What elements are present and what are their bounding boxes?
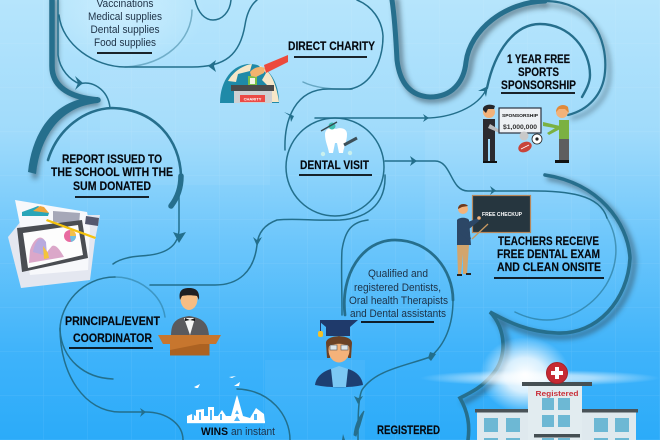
heading: teachers receive: TEACHERS RECEIVE xyxy=(498,234,599,248)
central block xyxy=(522,382,592,440)
text block: qualified staff: and Dental assistants xyxy=(350,308,446,320)
heading: sports sponsorship: SPORTS xyxy=(518,65,559,79)
text block: qualified staff: registered Dentists, xyxy=(354,282,441,294)
text: wins an instant: WINS xyxy=(201,426,228,438)
sports balls xyxy=(517,132,542,154)
cheque xyxy=(499,108,541,133)
icon: tooth with brush xyxy=(321,122,357,156)
central block: Registered xyxy=(536,391,578,398)
flow: principal circle and lower branches xyxy=(60,277,290,440)
text: wins an instant: an instant xyxy=(231,426,275,438)
heading: dental visit: DENTAL VISIT xyxy=(300,158,370,172)
flow: top circle and report circle xyxy=(48,0,257,264)
flow: dental visit circle and branches xyxy=(150,0,616,320)
heading: principal / event coordinator: COORDINATOR xyxy=(73,331,152,345)
heading: sports sponsorship: 1 YEAR FREE xyxy=(507,52,570,66)
icon: charity globe and donation box: CHARITY xyxy=(244,96,262,102)
icon: graduate dentist xyxy=(315,320,363,387)
building wings xyxy=(475,409,638,440)
heading: report issued xyxy=(51,152,173,197)
heading: teachers receive xyxy=(494,234,604,278)
heading: report issued: THE SCHOOL WITH THE xyxy=(51,165,173,179)
figure: man in green xyxy=(543,105,569,163)
red cross badge xyxy=(546,362,568,384)
text block: qualified staff xyxy=(349,268,448,322)
icon: charity globe and donation box xyxy=(220,55,288,103)
heading: teachers receive: FREE DENTAL EXAM xyxy=(497,247,600,261)
icon: principal at podium xyxy=(158,288,221,356)
heading: sports sponsorship: SPONSORSHIP xyxy=(501,78,576,92)
teacher figure xyxy=(457,204,488,276)
cheque: SPONSORSHIP xyxy=(502,113,538,118)
text block: qualified staff: Oral health Therapists xyxy=(349,295,448,307)
blackboard: FREE CHECKUP xyxy=(482,212,523,218)
heading: principal / event coordinator xyxy=(65,314,161,348)
figure: man in suit xyxy=(483,105,503,163)
flow: qualified circle and descent xyxy=(342,220,453,440)
heading: direct charity: DIRECT CHARITY xyxy=(288,39,375,53)
icon: report papers and tablet xyxy=(8,200,100,288)
heading: direct charity xyxy=(288,39,375,57)
glow xyxy=(420,337,660,413)
heading: registered: REGISTERED xyxy=(377,423,440,437)
text block: supplies list: Food supplies xyxy=(94,37,156,49)
text block: supplies list: Medical supplies xyxy=(88,11,162,23)
heading: report issued: SUM DONATED xyxy=(73,179,151,193)
heading: teachers receive: AND CLEAN ONSITE xyxy=(497,260,601,274)
heading: report issued: REPORT ISSUED TO xyxy=(62,152,162,166)
text block: supplies list: Dental supplies xyxy=(90,24,160,36)
text: wins an instant xyxy=(201,426,275,438)
heading: sports sponsorship xyxy=(501,52,576,93)
heading: principal / event coordinator: PRINCIPAL/EVENT xyxy=(65,314,161,328)
text block: supplies list xyxy=(88,0,162,53)
icon: hospital with glow xyxy=(420,337,660,440)
text block: qualified staff: Qualified and xyxy=(368,268,428,280)
icon: sponsorship cheque handover xyxy=(483,105,569,163)
icon: travel skyline xyxy=(187,376,265,423)
cheque: $1,000,000 xyxy=(503,125,538,131)
icon: teacher at blackboard xyxy=(457,196,530,276)
